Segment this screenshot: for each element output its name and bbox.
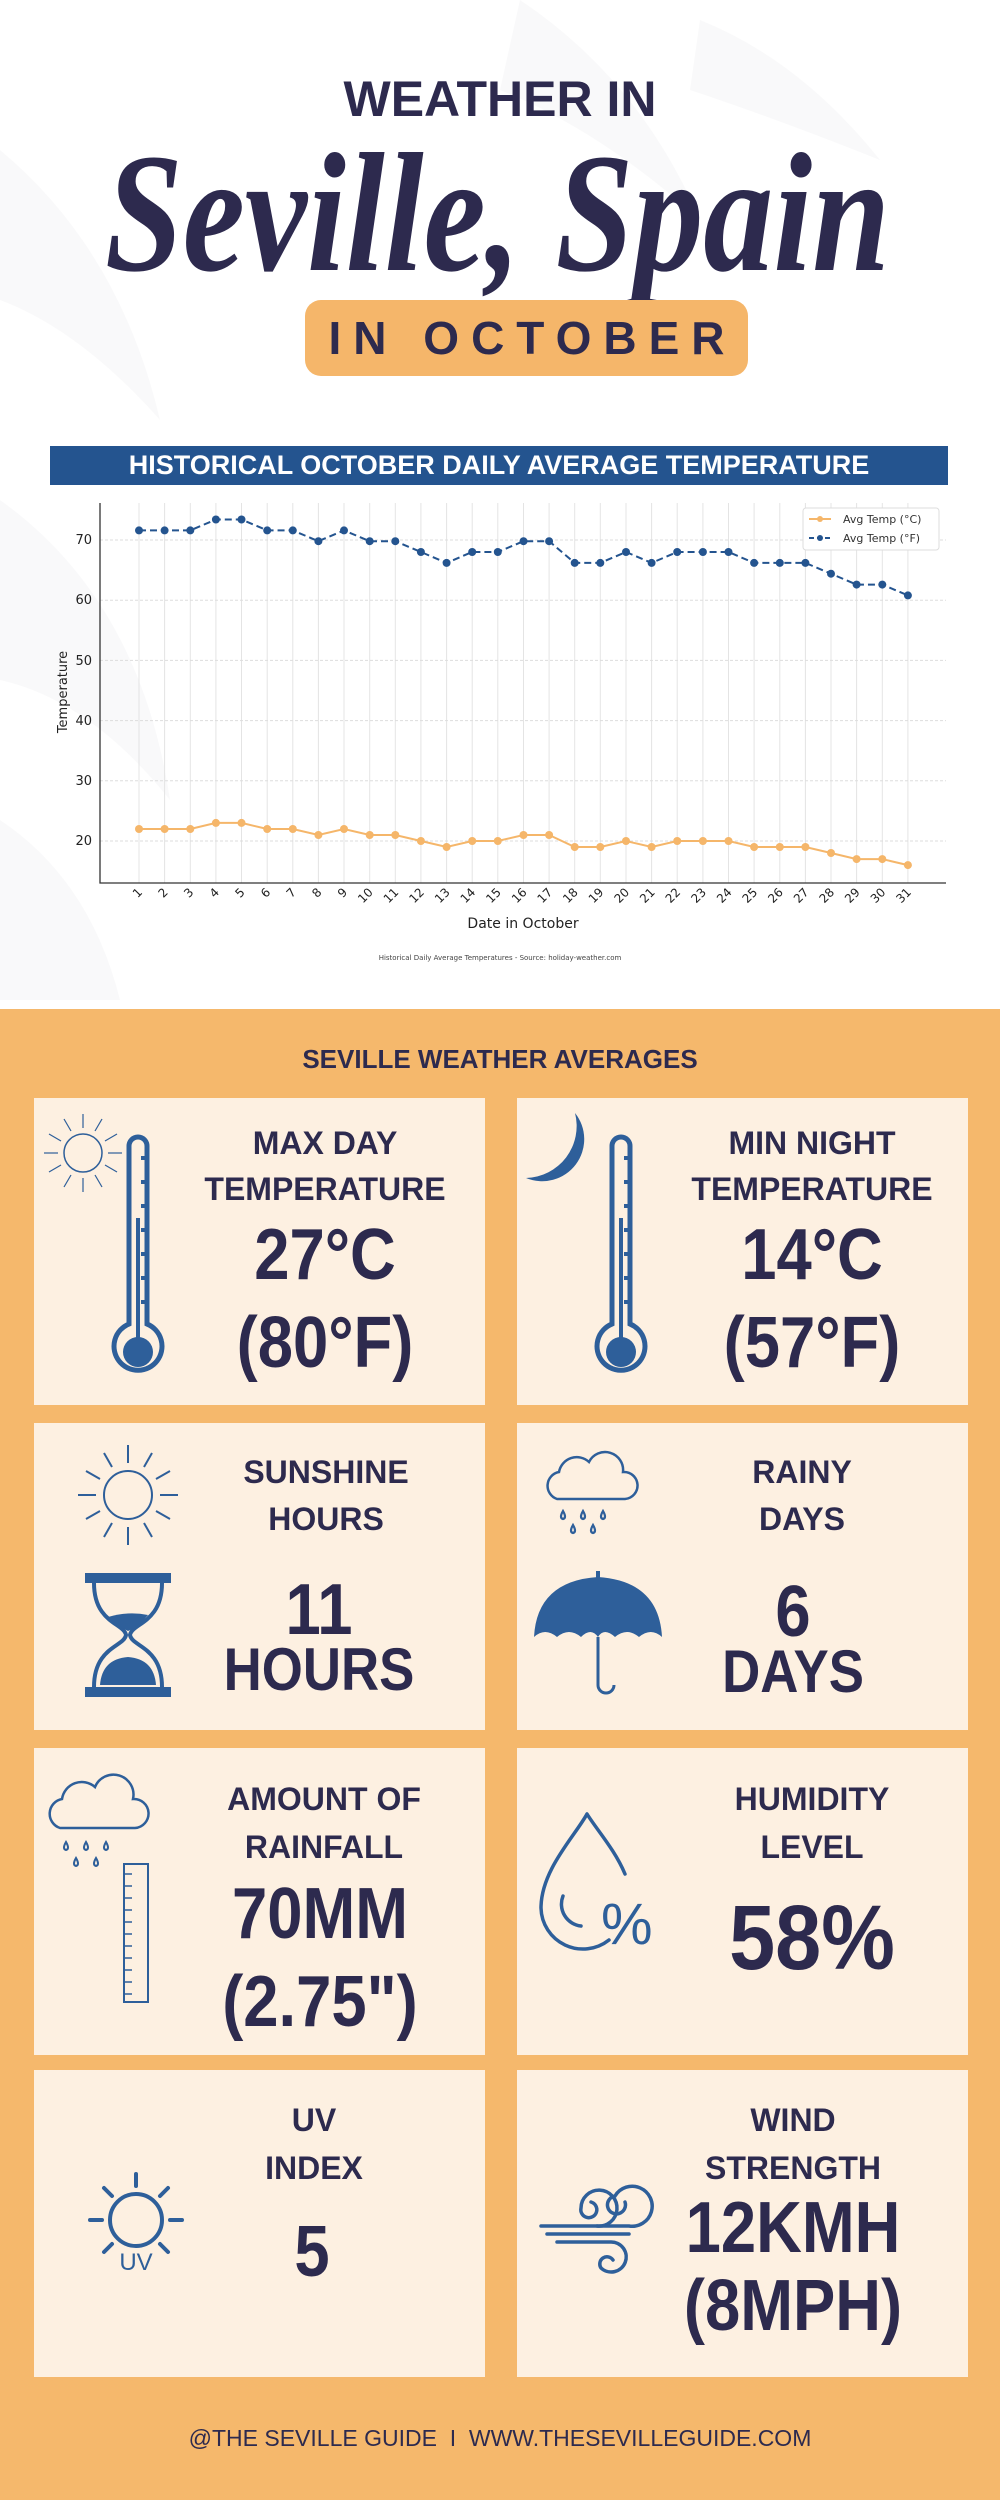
card: min night temperature — [517, 1098, 968, 1405]
line chart: 14 — [458, 885, 478, 906]
text block — [729, 1781, 895, 1989]
text block: (8MPH) — [684, 2266, 902, 2346]
card: uv index — [34, 2070, 485, 2377]
text block — [204, 1125, 446, 1383]
line chart: 20 — [75, 834, 92, 849]
icon: rain cloud and gauge — [48, 1773, 150, 2003]
card: amount of rainfall — [34, 1748, 485, 2055]
text block — [691, 1125, 933, 1383]
line chart: 21 — [637, 885, 658, 906]
line chart: 9 — [335, 885, 350, 901]
text block: 58% — [729, 1887, 895, 1989]
subtitle pill: in october: IN OCTOBER — [329, 312, 736, 364]
text block: 6 — [775, 1572, 811, 1652]
text block: SUNSHINE — [243, 1454, 409, 1490]
icon: moon and thermometer — [526, 1113, 648, 1373]
line chart: Date in October — [467, 916, 579, 932]
icon: drop with percent — [539, 1812, 653, 1957]
text block: HUMIDITY — [735, 1781, 889, 1817]
line chart: 22 — [663, 885, 683, 906]
line chart: 11 — [381, 885, 401, 906]
line chart: 23 — [688, 885, 709, 906]
chart header bar: HISTORICAL OCTOBER DAILY AVERAGE TEMPERATURE — [129, 450, 869, 480]
text block — [224, 1454, 414, 1703]
text block: (57°F) — [724, 1303, 900, 1383]
title: weather in: WEATHER IN — [344, 71, 656, 127]
text block: HOURS — [224, 1636, 414, 1703]
text block — [222, 1781, 421, 2042]
text block: (2.75") — [222, 1962, 418, 2042]
line chart: 3 — [181, 885, 196, 901]
line chart: 18 — [560, 885, 581, 906]
line chart: 30 — [868, 885, 888, 906]
text block: TEMPERATURE — [691, 1171, 933, 1207]
line chart: 16 — [509, 885, 530, 906]
line chart: 7 — [284, 885, 299, 901]
line chart: Avg Temp (°C) — [843, 513, 921, 526]
line chart: 4 — [207, 885, 222, 901]
line chart: 26 — [765, 885, 786, 906]
line chart: Historical Daily Average Temperatures - Source: holiday-weather.com — [379, 954, 621, 962]
card: rainy days — [517, 1423, 968, 1730]
subtitle pill: in october — [305, 300, 748, 376]
line chart: 70 — [75, 533, 92, 548]
text block — [684, 2102, 902, 2346]
icon: uv sun: UV — [119, 2249, 153, 2276]
line chart: 31 — [893, 885, 914, 906]
line chart: 25 — [740, 885, 760, 906]
text block: RAINY — [752, 1454, 852, 1490]
line chart: 19 — [586, 885, 606, 906]
text block: AMOUNT OF — [227, 1781, 421, 1817]
line chart: 13 — [432, 885, 453, 906]
text block — [265, 2102, 363, 2292]
chart header bar — [50, 446, 948, 485]
text block: HOURS — [268, 1501, 384, 1537]
icon: rain cloud and umbrella — [534, 1450, 662, 1694]
text block: INDEX — [265, 2150, 363, 2186]
line chart: 12 — [406, 885, 427, 906]
line chart: 29 — [842, 885, 863, 906]
icon: wind swirls — [539, 2184, 654, 2274]
text block: 27°C — [254, 1215, 396, 1295]
text block: MAX DAY — [253, 1125, 397, 1161]
text block: DAYS — [722, 1638, 864, 1705]
text block: LEVEL — [760, 1829, 864, 1865]
text block: MIN NIGHT — [728, 1125, 896, 1161]
line chart: 2 — [155, 885, 171, 901]
line chart: 1 — [130, 885, 145, 901]
text block: (80°F) — [237, 1303, 413, 1383]
line chart: 50 — [75, 654, 92, 669]
line chart: 24 — [714, 885, 735, 906]
background palm leaves — [0, 0, 1000, 1010]
text block: 11 — [286, 1570, 352, 1650]
panel: weather averages — [0, 1009, 1000, 2500]
text block: TEMPERATURE — [204, 1171, 446, 1207]
line chart: 27 — [791, 885, 812, 906]
text block: 5 — [294, 2212, 330, 2292]
line chart: Temperature — [56, 651, 71, 734]
icon: sun and thermometer — [44, 1114, 164, 1373]
line chart: 60 — [75, 593, 92, 608]
card: humidity level — [517, 1748, 968, 2055]
text block: 70MM — [232, 1874, 408, 1954]
line chart: 8 — [309, 885, 325, 901]
line chart: 30 — [75, 774, 92, 789]
footer credit: @THE SEVILLE GUIDE I WWW.THESEVILLEGUIDE.COM — [189, 2425, 811, 2451]
text block — [722, 1454, 864, 1705]
icon: drop with percent: % — [601, 1892, 653, 1957]
line chart: 6 — [258, 885, 273, 901]
heading: seville weather averages: SEVILLE WEATHER AVERAGES — [302, 1044, 698, 1074]
line chart: 15 — [483, 885, 504, 906]
card: wind strength — [517, 2070, 968, 2377]
icon: uv sun — [88, 2172, 184, 2276]
text block: WIND — [750, 2102, 836, 2138]
line chart: 40 — [75, 714, 92, 729]
line chart — [56, 503, 946, 962]
icon: sun and hourglass — [78, 1445, 178, 1697]
line chart: 17 — [535, 885, 555, 906]
line chart: 10 — [355, 885, 376, 906]
card: max day temperature — [34, 1098, 485, 1405]
text block: 12KMH — [686, 2188, 900, 2268]
card: sunshine hours — [34, 1423, 485, 1730]
text block: UV — [292, 2102, 336, 2138]
line chart: 20 — [611, 885, 632, 906]
line chart: Avg Temp (°F) — [843, 532, 920, 545]
text block: RAINFALL — [245, 1829, 403, 1865]
text block: STRENGTH — [705, 2150, 881, 2186]
line chart: 28 — [816, 885, 837, 906]
line chart: 5 — [232, 885, 248, 901]
text block: DAYS — [759, 1501, 845, 1537]
text block: 14°C — [741, 1215, 883, 1295]
